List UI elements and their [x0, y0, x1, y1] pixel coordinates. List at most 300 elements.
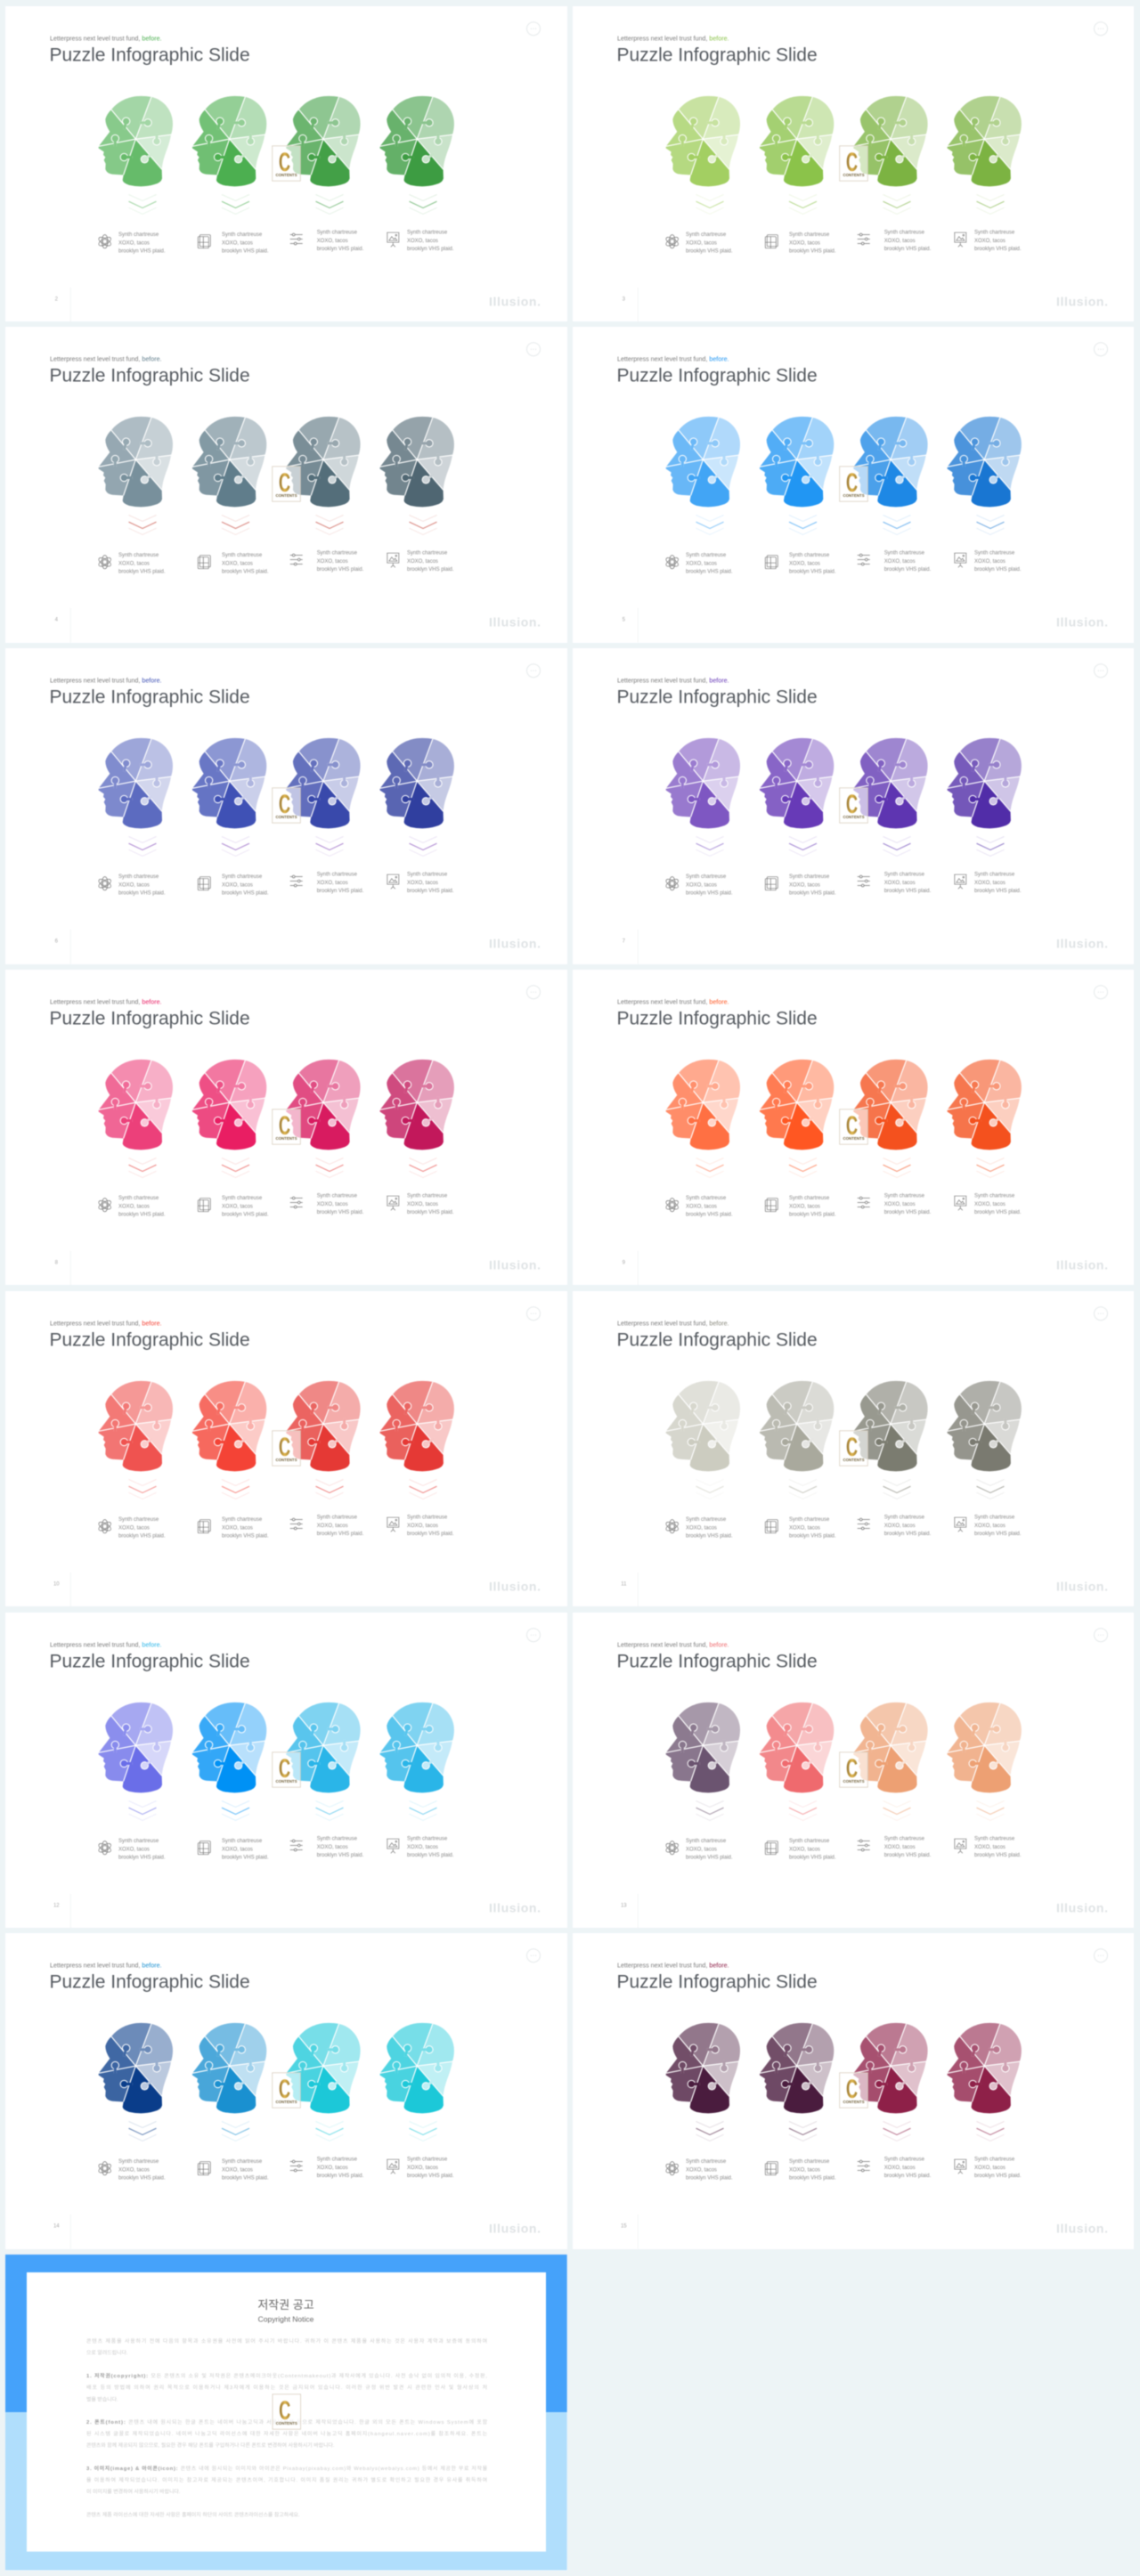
- slide 6: purple: [573, 648, 1134, 964]
- caption 3: Synth chartreuse: [884, 1836, 924, 1841]
- head 3: [286, 1702, 361, 1792]
- caption 4: XOXO, tacos: [974, 881, 1006, 886]
- head 4: [379, 95, 454, 186]
- watermark: C: [279, 2076, 290, 2105]
- font paragraph: 된 시스템 글꼴로 제작되었습니다. 네이버 나눔고딕 라이선스에 대한 자세한 사항은 네이버 나눔고딕 홈페이지(hangeul.naver.com)를 참조하세요. 폰트는: [86, 2430, 488, 2437]
- title: Puzzle Infographic Slide: [616, 1651, 817, 1671]
- caption 2: XOXO, tacos: [222, 1204, 253, 1209]
- head 2: [759, 1381, 834, 1471]
- logo: Illusion.: [489, 937, 541, 951]
- watermark: [273, 2394, 301, 2429]
- icon: flower: [97, 1198, 112, 1212]
- watermark: [273, 1109, 300, 1144]
- subtitle: Letterpress next level trust fund, before.: [617, 999, 729, 1006]
- caption 4: brooklyn VHS plaid.: [974, 567, 1021, 573]
- caption 1: XOXO, tacos: [686, 562, 717, 567]
- chevrons 1: [128, 516, 156, 535]
- caption 4: brooklyn VHS plaid.: [407, 1210, 454, 1215]
- watermark: CONTENTS: [275, 2100, 297, 2104]
- caption 2: XOXO, tacos: [789, 240, 820, 246]
- logo: Illusion.: [1056, 2222, 1108, 2236]
- icon: sliders: [290, 1518, 303, 1530]
- watermark: CONTENTS: [275, 815, 297, 819]
- caption 4: brooklyn VHS plaid.: [407, 2174, 454, 2179]
- caption 4: brooklyn VHS plaid.: [407, 246, 454, 251]
- icon: presentation: [954, 1517, 966, 1532]
- icon: panels: [765, 877, 778, 890]
- chevrons 2: [789, 194, 817, 214]
- head 2: [191, 2023, 266, 2114]
- icon: flower: [97, 1841, 112, 1854]
- title: Puzzle Infographic Slide: [49, 1651, 250, 1671]
- icon: flower: [97, 1519, 112, 1532]
- head 3: [852, 95, 927, 186]
- logo: Illusion.: [489, 1579, 541, 1593]
- caption 3: brooklyn VHS plaid.: [884, 1852, 931, 1857]
- caption 4: Synth chartreuse: [974, 873, 1014, 878]
- caption 1: XOXO, tacos: [118, 240, 150, 246]
- icon: presentation: [954, 232, 966, 247]
- logo: Illusion.: [1056, 615, 1108, 630]
- icon: flower: [664, 2162, 680, 2175]
- chevrons 4: [976, 1479, 1004, 1499]
- caption 2: XOXO, tacos: [222, 2168, 253, 2174]
- head 2: [191, 417, 266, 508]
- icon: more menu: [526, 986, 540, 999]
- caption 4: XOXO, tacos: [407, 1523, 438, 1528]
- caption 1: brooklyn VHS plaid.: [686, 2176, 732, 2182]
- head 3: [852, 417, 927, 508]
- caption 1: brooklyn VHS plaid.: [118, 570, 166, 575]
- caption 1: Synth chartreuse: [686, 553, 727, 558]
- caption 1: Synth chartreuse: [118, 1196, 159, 1201]
- caption 2: brooklyn VHS plaid.: [789, 570, 835, 575]
- chevrons 4: [976, 1800, 1004, 1820]
- head 4: [946, 2023, 1021, 2114]
- caption 3: Synth chartreuse: [884, 1515, 924, 1520]
- icon: presentation: [387, 553, 399, 567]
- caption 3: brooklyn VHS plaid.: [884, 1210, 931, 1215]
- caption 3: brooklyn VHS plaid.: [884, 246, 931, 251]
- head 2: [191, 95, 266, 186]
- caption 2: Synth chartreuse: [222, 1196, 263, 1201]
- icon: more menu: [526, 343, 540, 356]
- subtitle: Letterpress next level trust fund, before.: [50, 356, 162, 363]
- caption 3: XOXO, tacos: [884, 559, 915, 565]
- icon: sliders: [290, 1197, 303, 1208]
- chevrons 2: [222, 1479, 249, 1499]
- caption 2: brooklyn VHS plaid.: [789, 1533, 835, 1539]
- caption 4: XOXO, tacos: [407, 238, 438, 243]
- chevrons 4: [409, 194, 436, 214]
- caption 1: XOXO, tacos: [686, 2168, 717, 2174]
- chevrons 2: [222, 2122, 249, 2141]
- icon: flower: [664, 556, 680, 569]
- caption 1: Synth chartreuse: [118, 874, 159, 880]
- caption 4: XOXO, tacos: [407, 881, 438, 886]
- caption 1: Synth chartreuse: [686, 232, 727, 238]
- subtitle: Letterpress next level trust fund, before.: [617, 1320, 729, 1327]
- watermark: C: [279, 2397, 290, 2426]
- icon: more menu: [526, 1306, 540, 1320]
- head 2: [759, 95, 834, 186]
- caption 4: brooklyn VHS plaid.: [407, 1532, 454, 1537]
- caption 3: Synth chartreuse: [317, 551, 358, 557]
- chevrons 1: [128, 2122, 156, 2141]
- subtitle: Letterpress next level trust fund, before.: [617, 356, 729, 363]
- chevrons 1: [128, 1800, 156, 1820]
- chevrons 1: [128, 1158, 156, 1177]
- watermark: C: [279, 1433, 290, 1462]
- chevrons 4: [409, 516, 436, 535]
- copyright paragraph: 배포 등의 방법에 의하여 권리 목적으로 이용하거나 제3자에게 이용하는 것은 금지되어 있습니다. 이러한 규정 위반 발견 시 관련한 민사 및 형사상의 처: [86, 2384, 487, 2391]
- page number: 5: [622, 618, 625, 623]
- chevrons 4: [409, 1800, 436, 1820]
- caption 2: XOXO, tacos: [222, 883, 253, 889]
- caption 1: XOXO, tacos: [118, 883, 150, 889]
- icon: more menu: [1094, 664, 1107, 678]
- head 2: [759, 1060, 834, 1150]
- watermark: CONTENTS: [843, 172, 864, 176]
- watermark: CONTENTS: [843, 1778, 864, 1783]
- intro paragraph: 으로 알려드립니다.: [86, 2349, 128, 2356]
- icon: panels: [765, 2162, 778, 2175]
- caption 1: brooklyn VHS plaid.: [686, 248, 732, 254]
- icon: panels: [198, 234, 210, 248]
- caption 1: Synth chartreuse: [686, 1839, 727, 1844]
- icon: flower: [97, 556, 112, 569]
- font paragraph: [86, 2418, 488, 2449]
- head 1: [98, 417, 173, 508]
- copyright subtitle: Copyright Notice: [258, 2315, 314, 2324]
- icon: more menu: [1094, 343, 1107, 356]
- slide 2: light green: [573, 5, 1134, 321]
- caption 2: brooklyn VHS plaid.: [789, 2176, 835, 2182]
- caption 2: Synth chartreuse: [789, 1196, 830, 1201]
- head 4: [379, 417, 454, 508]
- icon: panels: [765, 1519, 778, 1532]
- chevrons 2: [789, 837, 817, 857]
- caption 3: brooklyn VHS plaid.: [317, 1210, 364, 1215]
- head 4: [946, 95, 1021, 186]
- caption 3: Synth chartreuse: [317, 1836, 358, 1841]
- icon: flower: [97, 2162, 112, 2175]
- chevrons 4: [976, 194, 1004, 214]
- caption 4: brooklyn VHS plaid.: [974, 889, 1021, 894]
- caption 3: Synth chartreuse: [884, 873, 924, 878]
- caption 1: brooklyn VHS plaid.: [118, 248, 166, 254]
- head 3: [286, 738, 361, 828]
- head 4: [379, 738, 454, 828]
- chevrons 3: [315, 837, 343, 857]
- image and icon paragraph: 이 이미지를 변경하여 사용하시기 바랍니다.: [86, 2488, 181, 2495]
- caption 2: brooklyn VHS plaid.: [222, 2176, 269, 2182]
- head 2: [759, 417, 834, 508]
- chevrons 3: [315, 194, 343, 214]
- caption 2: Synth chartreuse: [222, 2159, 263, 2165]
- caption 4: Synth chartreuse: [407, 2158, 448, 2163]
- icon: panels: [765, 1841, 778, 1854]
- head 1: [665, 1381, 740, 1471]
- icon: presentation: [954, 874, 966, 889]
- caption 3: Synth chartreuse: [884, 230, 924, 235]
- caption 3: XOXO, tacos: [317, 2166, 348, 2171]
- head 2: [759, 1702, 834, 1792]
- caption 4: Synth chartreuse: [407, 1193, 448, 1199]
- caption 3: XOXO, tacos: [317, 881, 348, 886]
- caption 1: brooklyn VHS plaid.: [118, 2176, 166, 2182]
- caption 3: brooklyn VHS plaid.: [317, 246, 364, 251]
- watermark: C: [279, 791, 290, 819]
- logo: Illusion.: [489, 615, 541, 630]
- caption 1: XOXO, tacos: [118, 1204, 150, 1209]
- icon: presentation: [954, 1839, 966, 1853]
- chevrons 1: [696, 1479, 723, 1499]
- chevrons 2: [222, 516, 249, 535]
- icon: sliders: [857, 2160, 869, 2172]
- head 2: [759, 2023, 834, 2114]
- head 4: [946, 1381, 1021, 1471]
- slide 12: mauve to peach: [573, 1612, 1134, 1928]
- icon: presentation: [954, 1196, 966, 1210]
- caption 4: XOXO, tacos: [974, 238, 1006, 243]
- intro paragraph: [86, 2337, 487, 2356]
- head 3: [286, 1060, 361, 1150]
- caption 1: XOXO, tacos: [686, 1525, 717, 1531]
- caption 3: Synth chartreuse: [317, 2158, 358, 2163]
- caption 3: XOXO, tacos: [317, 559, 348, 565]
- panel: copyright notice: [5, 2255, 567, 2571]
- title: Puzzle Infographic Slide: [616, 1329, 817, 1350]
- caption 2: Synth chartreuse: [222, 1517, 263, 1523]
- watermark: C: [846, 2076, 858, 2105]
- title: Puzzle Infographic Slide: [49, 687, 250, 708]
- caption 2: XOXO, tacos: [789, 1525, 820, 1531]
- icon: panels: [198, 877, 210, 890]
- caption 2: Synth chartreuse: [222, 874, 263, 880]
- watermark: [839, 145, 867, 181]
- caption 4: Synth chartreuse: [974, 230, 1014, 235]
- icon: presentation: [387, 1839, 399, 1853]
- caption 2: Synth chartreuse: [789, 2159, 830, 2165]
- caption 1: brooklyn VHS plaid.: [686, 1855, 732, 1860]
- caption 2: XOXO, tacos: [222, 1847, 253, 1852]
- caption 3: Synth chartreuse: [884, 2158, 924, 2163]
- head 1: [665, 95, 740, 186]
- watermark: [839, 2073, 867, 2108]
- caption 3: brooklyn VHS plaid.: [317, 2174, 364, 2179]
- chevrons 1: [696, 2122, 723, 2141]
- icon: more menu: [526, 1949, 540, 1962]
- icon: sliders: [857, 875, 869, 887]
- watermark: CONTENTS: [843, 1458, 864, 1462]
- caption 4: Synth chartreuse: [974, 1836, 1014, 1841]
- caption 2: brooklyn VHS plaid.: [222, 1213, 269, 1218]
- caption 2: Synth chartreuse: [789, 1517, 830, 1523]
- caption 3: brooklyn VHS plaid.: [317, 889, 364, 894]
- caption 4: XOXO, tacos: [407, 1844, 438, 1849]
- head 3: [286, 417, 361, 508]
- head 3: [852, 738, 927, 828]
- chevrons 2: [222, 194, 249, 214]
- head 2: [191, 1060, 266, 1150]
- caption 2: brooklyn VHS plaid.: [222, 248, 269, 254]
- watermark: CONTENTS: [275, 172, 297, 176]
- watermark: C: [279, 148, 290, 177]
- caption 3: XOXO, tacos: [317, 1523, 348, 1528]
- caption 2: brooklyn VHS plaid.: [222, 891, 269, 897]
- subtitle: Letterpress next level trust fund, before.: [50, 1641, 162, 1648]
- caption 1: XOXO, tacos: [118, 2168, 150, 2174]
- slide 3: blue gray: [5, 327, 567, 643]
- caption 2: Synth chartreuse: [789, 232, 830, 238]
- chevrons 4: [409, 1158, 436, 1177]
- page number: 9: [622, 1260, 625, 1265]
- title: Puzzle Infographic Slide: [49, 1008, 250, 1028]
- page number: 15: [621, 2224, 627, 2230]
- head 3: [852, 1060, 927, 1150]
- head 4: [379, 1702, 454, 1792]
- icon: sliders: [290, 1840, 303, 1850]
- icon: flower: [664, 877, 680, 890]
- logo: Illusion.: [1056, 937, 1108, 951]
- head 4: [946, 738, 1021, 828]
- chevrons 4: [976, 837, 1004, 857]
- head 1: [665, 738, 740, 828]
- caption 2: Synth chartreuse: [789, 874, 830, 880]
- caption 3: XOXO, tacos: [317, 238, 348, 243]
- head 1: [665, 2023, 740, 2114]
- title: Puzzle Infographic Slide: [616, 1972, 817, 1993]
- caption 2: brooklyn VHS plaid.: [222, 570, 269, 575]
- caption 1: XOXO, tacos: [118, 1847, 150, 1852]
- caption 4: Synth chartreuse: [974, 551, 1014, 557]
- watermark: CONTENTS: [275, 1778, 297, 1783]
- caption 4: XOXO, tacos: [974, 1523, 1006, 1528]
- watermark: C: [846, 1433, 858, 1462]
- caption 4: Synth chartreuse: [407, 1515, 448, 1520]
- chevrons 4: [976, 2122, 1004, 2141]
- caption 2: XOXO, tacos: [789, 883, 820, 889]
- subtitle: Letterpress next level trust fund, before.: [617, 1641, 729, 1648]
- caption 4: XOXO, tacos: [407, 559, 438, 565]
- head 4: [946, 1702, 1021, 1792]
- caption 3: brooklyn VHS plaid.: [884, 1532, 931, 1537]
- chevrons 3: [883, 837, 910, 857]
- subtitle: Letterpress next level trust fund, before.: [617, 1962, 729, 1970]
- head 3: [286, 95, 361, 186]
- slide 8: orange: [573, 970, 1134, 1285]
- title: Puzzle Infographic Slide: [616, 45, 817, 65]
- watermark: [273, 1751, 300, 1787]
- watermark: [839, 467, 867, 501]
- icon: presentation: [387, 2159, 399, 2174]
- head 1: [98, 2023, 173, 2114]
- icon: more menu: [526, 1628, 540, 1641]
- caption 1: brooklyn VHS plaid.: [686, 891, 732, 897]
- caption 1: XOXO, tacos: [686, 1204, 717, 1209]
- chevrons 3: [315, 2122, 343, 2141]
- slide 14: plum to crimson: [573, 1933, 1134, 2249]
- watermark: [839, 788, 867, 823]
- caption 4: Synth chartreuse: [974, 2158, 1014, 2163]
- icon: presentation: [387, 232, 399, 247]
- watermark: [839, 1751, 867, 1787]
- caption 4: brooklyn VHS plaid.: [407, 889, 454, 894]
- watermark: [273, 788, 300, 823]
- icon: more menu: [1094, 1628, 1107, 1641]
- caption 1: Synth chartreuse: [686, 874, 727, 880]
- chevrons 2: [222, 1158, 249, 1177]
- caption 1: XOXO, tacos: [686, 240, 717, 246]
- page number: 6: [55, 939, 59, 945]
- caption 3: XOXO, tacos: [884, 1844, 915, 1849]
- icon: panels: [765, 234, 778, 248]
- caption 2: Synth chartreuse: [222, 553, 263, 558]
- icon: more menu: [1094, 21, 1107, 35]
- caption 4: XOXO, tacos: [974, 1202, 1006, 1207]
- caption 1: Synth chartreuse: [118, 553, 159, 558]
- caption 4: brooklyn VHS plaid.: [974, 246, 1021, 251]
- caption 4: Synth chartreuse: [974, 1515, 1014, 1520]
- icon: panels: [198, 556, 210, 569]
- slide 11: indigo to cyan: [5, 1612, 567, 1928]
- chevrons 1: [128, 194, 156, 214]
- icon: panels: [765, 556, 778, 569]
- caption 2: Synth chartreuse: [222, 232, 263, 238]
- watermark: CONTENTS: [275, 1136, 297, 1141]
- watermark: C: [846, 469, 858, 499]
- chevrons 3: [883, 1158, 910, 1177]
- watermark: CONTENTS: [843, 815, 864, 819]
- icon: panels: [198, 1199, 210, 1212]
- page number: 3: [622, 297, 625, 302]
- page number: 13: [621, 1903, 627, 1908]
- chevrons 3: [315, 1800, 343, 1820]
- icon: flower: [97, 877, 112, 890]
- caption 4: Synth chartreuse: [974, 1193, 1014, 1199]
- caption 3: XOXO, tacos: [884, 881, 915, 886]
- intro paragraph: 콘텐츠 제품을 사용하기 전에 다음의 항목과 소유권을 사전에 읽어 주시기 바랍니다. 귀하가 이 콘텐츠 제품을 사용하는 것은 사용자 계약과 보증에 동의하여: [86, 2337, 487, 2344]
- caption 1: Synth chartreuse: [118, 232, 159, 238]
- caption 4: brooklyn VHS plaid.: [407, 567, 454, 573]
- caption 1: brooklyn VHS plaid.: [118, 1855, 166, 1860]
- caption 2: XOXO, tacos: [222, 240, 253, 246]
- caption 3: Synth chartreuse: [317, 1515, 358, 1520]
- subtitle: Letterpress next level trust fund, before.: [617, 35, 729, 42]
- icon: presentation: [387, 874, 399, 889]
- icon: sliders: [857, 233, 869, 244]
- chevrons 3: [883, 1800, 910, 1820]
- head 1: [98, 1381, 173, 1471]
- caption 3: Synth chartreuse: [317, 230, 358, 235]
- logo: Illusion.: [489, 294, 541, 308]
- chevrons 3: [883, 516, 910, 535]
- chevrons 3: [315, 1479, 343, 1499]
- caption 3: XOXO, tacos: [884, 238, 915, 243]
- caption 2: brooklyn VHS plaid.: [789, 1213, 835, 1218]
- head 2: [191, 1702, 266, 1792]
- icon: more menu: [1094, 1306, 1107, 1320]
- image and icon paragraph: [86, 2465, 488, 2495]
- head 1: [98, 1702, 173, 1792]
- slide 13: navy to teal: [5, 1933, 567, 2249]
- icon: sliders: [290, 233, 303, 244]
- caption 3: XOXO, tacos: [317, 1202, 348, 1207]
- watermark: [273, 2073, 300, 2108]
- caption 4: Synth chartreuse: [407, 551, 448, 557]
- watermark: C: [846, 1754, 858, 1784]
